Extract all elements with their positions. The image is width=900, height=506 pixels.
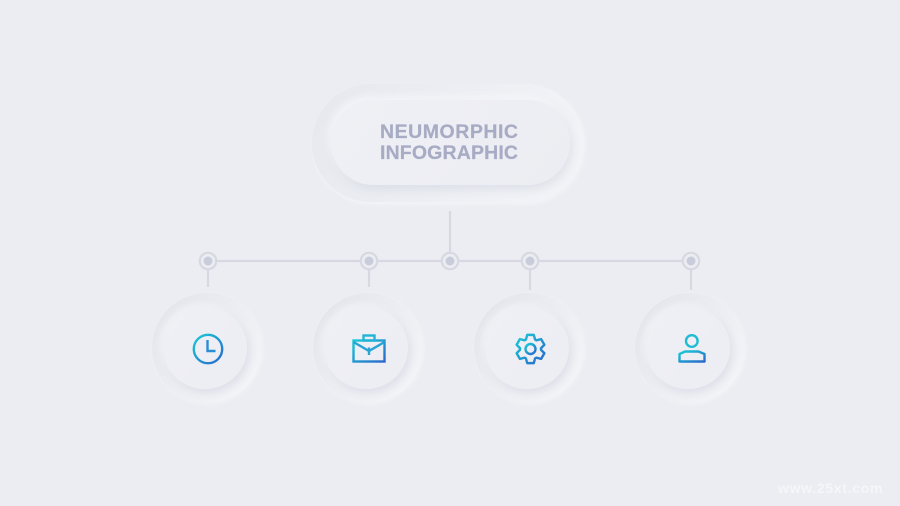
inner raised pill: [331, 100, 570, 185]
panel: circle 1: [152, 293, 262, 403]
icon: clock: [194, 335, 222, 363]
icon: gear: [517, 335, 544, 363]
panel: circle 4: [635, 293, 745, 403]
panel: title pill: [312, 84, 584, 202]
title: INFOGRAPHIC: [380, 142, 518, 164]
panel: circle 3: [474, 293, 584, 403]
watermark: www.25xt.com: [778, 480, 883, 496]
panel: circle 2: [313, 293, 423, 403]
title: NEUMORPHIC: [380, 121, 518, 143]
icon: briefcase: [354, 336, 384, 362]
icon: person: [680, 335, 704, 362]
